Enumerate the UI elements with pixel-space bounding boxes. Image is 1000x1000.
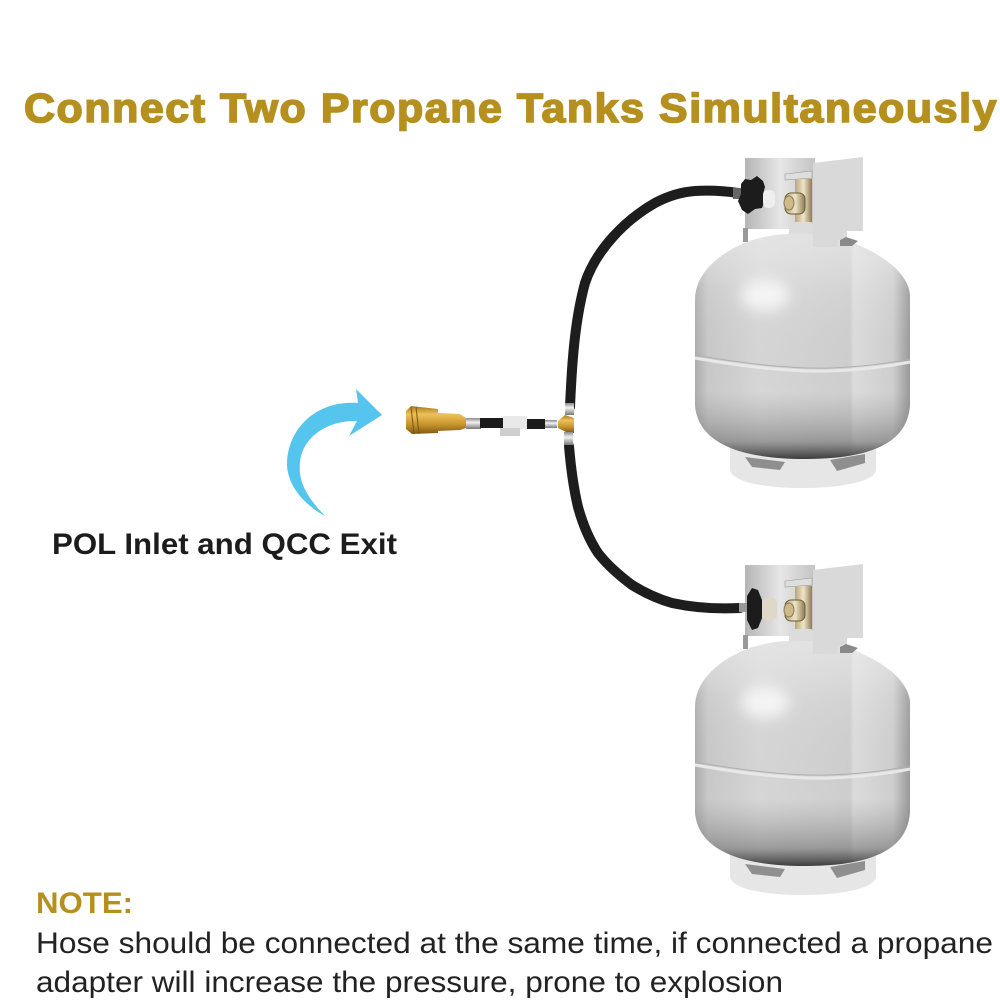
icon: blue curved arrow [287, 389, 382, 516]
note text: Hose should be connected at the same time, if connected a propane [36, 927, 993, 960]
note heading: NOTE: [36, 887, 133, 920]
note text [36, 927, 993, 999]
lower propane tank [695, 564, 910, 895]
lower hose [569, 446, 740, 608]
upper hose [570, 191, 738, 407]
QCC brass fitting and T connector [406, 403, 574, 445]
note text: adapter will increase the pressure, prone to explosion [36, 966, 783, 999]
upper hose knob [733, 176, 775, 214]
upper propane tank [695, 157, 910, 488]
label: POL Inlet and QCC Exit: POL Inlet and QCC Exit [52, 528, 397, 561]
lower hose knob [739, 588, 777, 630]
title: Connect Two Propane Tanks Simultaneously [24, 85, 998, 131]
